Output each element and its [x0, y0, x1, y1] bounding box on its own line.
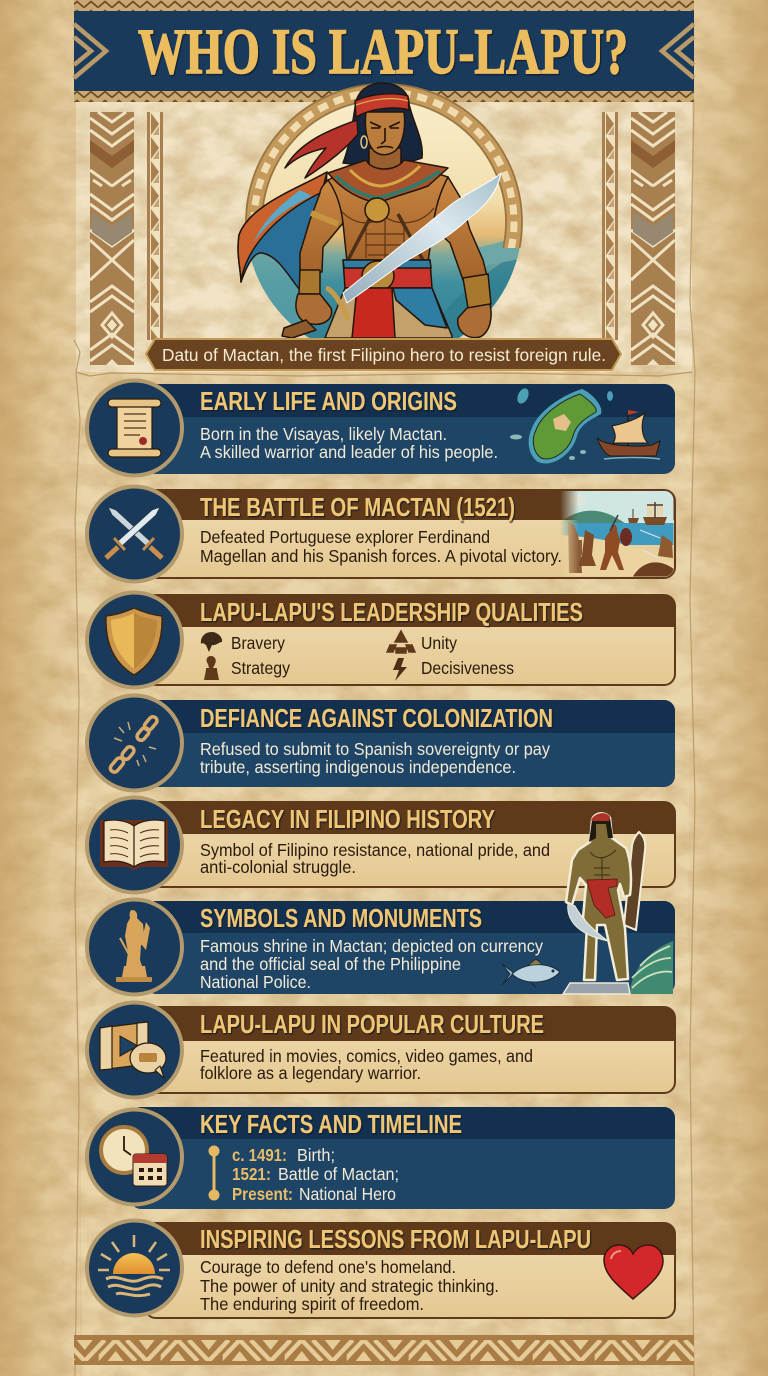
panel: legacy in Filipino history — [87, 798, 675, 892]
text block — [200, 840, 550, 877]
right banner ornament — [662, 24, 694, 78]
timeline entry: battle: Battle of Mactan; — [278, 1164, 399, 1184]
quality: strategy — [204, 656, 290, 680]
sword handle — [282, 320, 316, 338]
map of Mactan island — [510, 387, 613, 463]
text block: Famous shrine in Mactan; depicted on currency — [200, 936, 543, 956]
panel: leadership qualities — [87, 592, 675, 688]
text block: anti-colonial struggle. — [200, 857, 356, 877]
right fist — [458, 304, 491, 338]
text block: A skilled warrior and leader of his people. — [200, 442, 498, 462]
panel: early life and origins — [87, 380, 675, 476]
text block: Symbol of Filipino resistance, national pride, and — [200, 840, 550, 860]
torso — [328, 165, 448, 262]
timeline entry: battle: 1521: — [232, 1164, 271, 1184]
text block: Courage to defend one's homeland. — [200, 1257, 456, 1277]
quality: unity: Unity — [421, 633, 457, 653]
timeline entry: birth: Birth; — [297, 1145, 335, 1165]
heading: THE BATTLE OF MACTAN (1521) — [200, 492, 515, 522]
hero warrior portrait — [238, 83, 501, 338]
chest and abs shading — [340, 208, 434, 262]
statue headband — [591, 813, 610, 821]
icon circle: sunrise over waves — [87, 1220, 182, 1316]
text block: folklore as a legendary warrior. — [200, 1063, 421, 1083]
panel: popular culture — [87, 1002, 675, 1098]
text block — [200, 739, 550, 777]
left tribal pattern columns — [90, 112, 163, 365]
icon circle: scroll — [87, 380, 182, 476]
neck and face — [369, 148, 401, 180]
cape — [238, 172, 327, 296]
icon: fish — [502, 959, 560, 987]
text block: Featured in movies, comics, video games, and — [200, 1046, 533, 1066]
icon circle: shield — [87, 592, 182, 688]
icon circle: open book — [87, 798, 182, 892]
panel: defiance against colonization — [87, 696, 675, 790]
collar — [328, 160, 448, 203]
heading: KEY FACTS AND TIMELINE — [200, 1109, 462, 1139]
icon circle: clock and calendar — [87, 1110, 182, 1204]
timeline marker — [208, 1146, 220, 1200]
arm band — [311, 213, 338, 224]
quality: unity — [387, 631, 457, 653]
icon circle: broken chain — [87, 696, 182, 790]
text block — [200, 1257, 499, 1314]
heading: LAPU-LAPU'S LEADERSHIP QUALITIES — [200, 597, 583, 627]
heading: SYMBOLS AND MONUMENTS — [200, 903, 482, 933]
statue muscle detail — [590, 850, 616, 880]
chest straps — [347, 214, 424, 262]
heading: LEGACY IN FILIPINO HISTORY — [200, 804, 495, 834]
statue hair — [589, 818, 613, 842]
statue shield — [624, 832, 645, 930]
text block: Refused to submit to Spanish sovereignty or pay — [200, 739, 550, 759]
statue body — [566, 813, 631, 980]
belt — [343, 260, 432, 288]
timeline entry: birth: c. 1491: — [232, 1145, 287, 1165]
panel: inspiring lessons — [87, 1220, 675, 1318]
right bracer — [463, 274, 491, 308]
quality: bravery: Bravery — [231, 633, 285, 653]
icon: heart — [604, 1245, 663, 1299]
statue of Lapu-Lapu illustration — [563, 813, 645, 994]
medallion pendant — [365, 198, 389, 222]
headband — [355, 94, 409, 117]
panel: the battle of Mactan — [87, 486, 675, 582]
panel: symbols and monuments — [87, 900, 675, 994]
quality: strategy: Strategy — [231, 658, 290, 678]
right arm — [433, 177, 488, 280]
text block: Magellan and his Spanish forces. A pivotal victory. — [200, 546, 562, 566]
hero medallion — [240, 84, 525, 360]
text block — [200, 936, 543, 992]
left arm — [300, 180, 343, 272]
heading: DEFIANCE AGAINST COLONIZATION — [200, 703, 553, 733]
text block: tribute, asserting indigenous independence. — [200, 757, 516, 777]
text block — [200, 424, 498, 462]
battle scene illustration — [555, 491, 675, 578]
icon: sailing ship — [597, 410, 660, 459]
text block: The power of unity and strategic thinking. — [200, 1276, 499, 1296]
left fist — [296, 294, 332, 324]
title banner — [74, 0, 694, 102]
hair — [343, 83, 422, 165]
facial features — [370, 122, 400, 148]
timeline entry: present: National Hero — [299, 1184, 396, 1204]
timeline entry: present — [232, 1184, 396, 1204]
quality: decisiveness — [393, 658, 514, 681]
bottom tribal border — [74, 1335, 694, 1365]
text block — [200, 1046, 533, 1083]
statue plinth — [563, 983, 630, 994]
caption ribbon: Datu of Mactan, the first Filipino hero to resist foreign rule. — [162, 345, 606, 365]
text block — [200, 527, 562, 566]
left bracer — [299, 270, 320, 294]
statue sword — [568, 903, 608, 941]
ribbons — [285, 120, 358, 178]
icon circle: film and speech bubble — [87, 1002, 182, 1098]
right tribal pattern columns — [602, 112, 675, 365]
text block: Born in the Visayas, likely Mactan. — [200, 424, 447, 444]
heading: EARLY LIFE AND ORIGINS — [200, 386, 457, 416]
quality: decisiveness: Decisiveness — [421, 658, 514, 678]
icon circle: statue — [87, 900, 182, 994]
earrings — [361, 136, 367, 148]
sword blade — [343, 173, 501, 303]
heading: INSPIRING LESSONS FROM LAPU-LAPU — [200, 1224, 591, 1254]
icon circle: crossed swords — [87, 486, 182, 582]
text block: National Police. — [200, 972, 311, 992]
sword guard — [326, 288, 348, 320]
quality: bravery — [201, 632, 285, 653]
left banner ornament — [74, 24, 106, 78]
heading: LAPU-LAPU IN POPULAR CULTURE — [200, 1009, 544, 1039]
statue red sash — [587, 879, 617, 918]
caption ribbon — [146, 339, 621, 370]
text block: The enduring spirit of freedom. — [200, 1294, 424, 1314]
timeline entry: birth — [232, 1145, 335, 1165]
text block: Defeated Portuguese explorer Ferdinand — [200, 527, 490, 547]
skirt — [325, 288, 452, 338]
timeline entry: battle — [232, 1164, 399, 1184]
text block: and the official seal of the Philippine — [200, 954, 461, 974]
icon: palm fronds — [630, 941, 673, 994]
panel: key facts and timeline — [87, 1107, 675, 1209]
timeline entry: present: Present: — [232, 1184, 293, 1204]
